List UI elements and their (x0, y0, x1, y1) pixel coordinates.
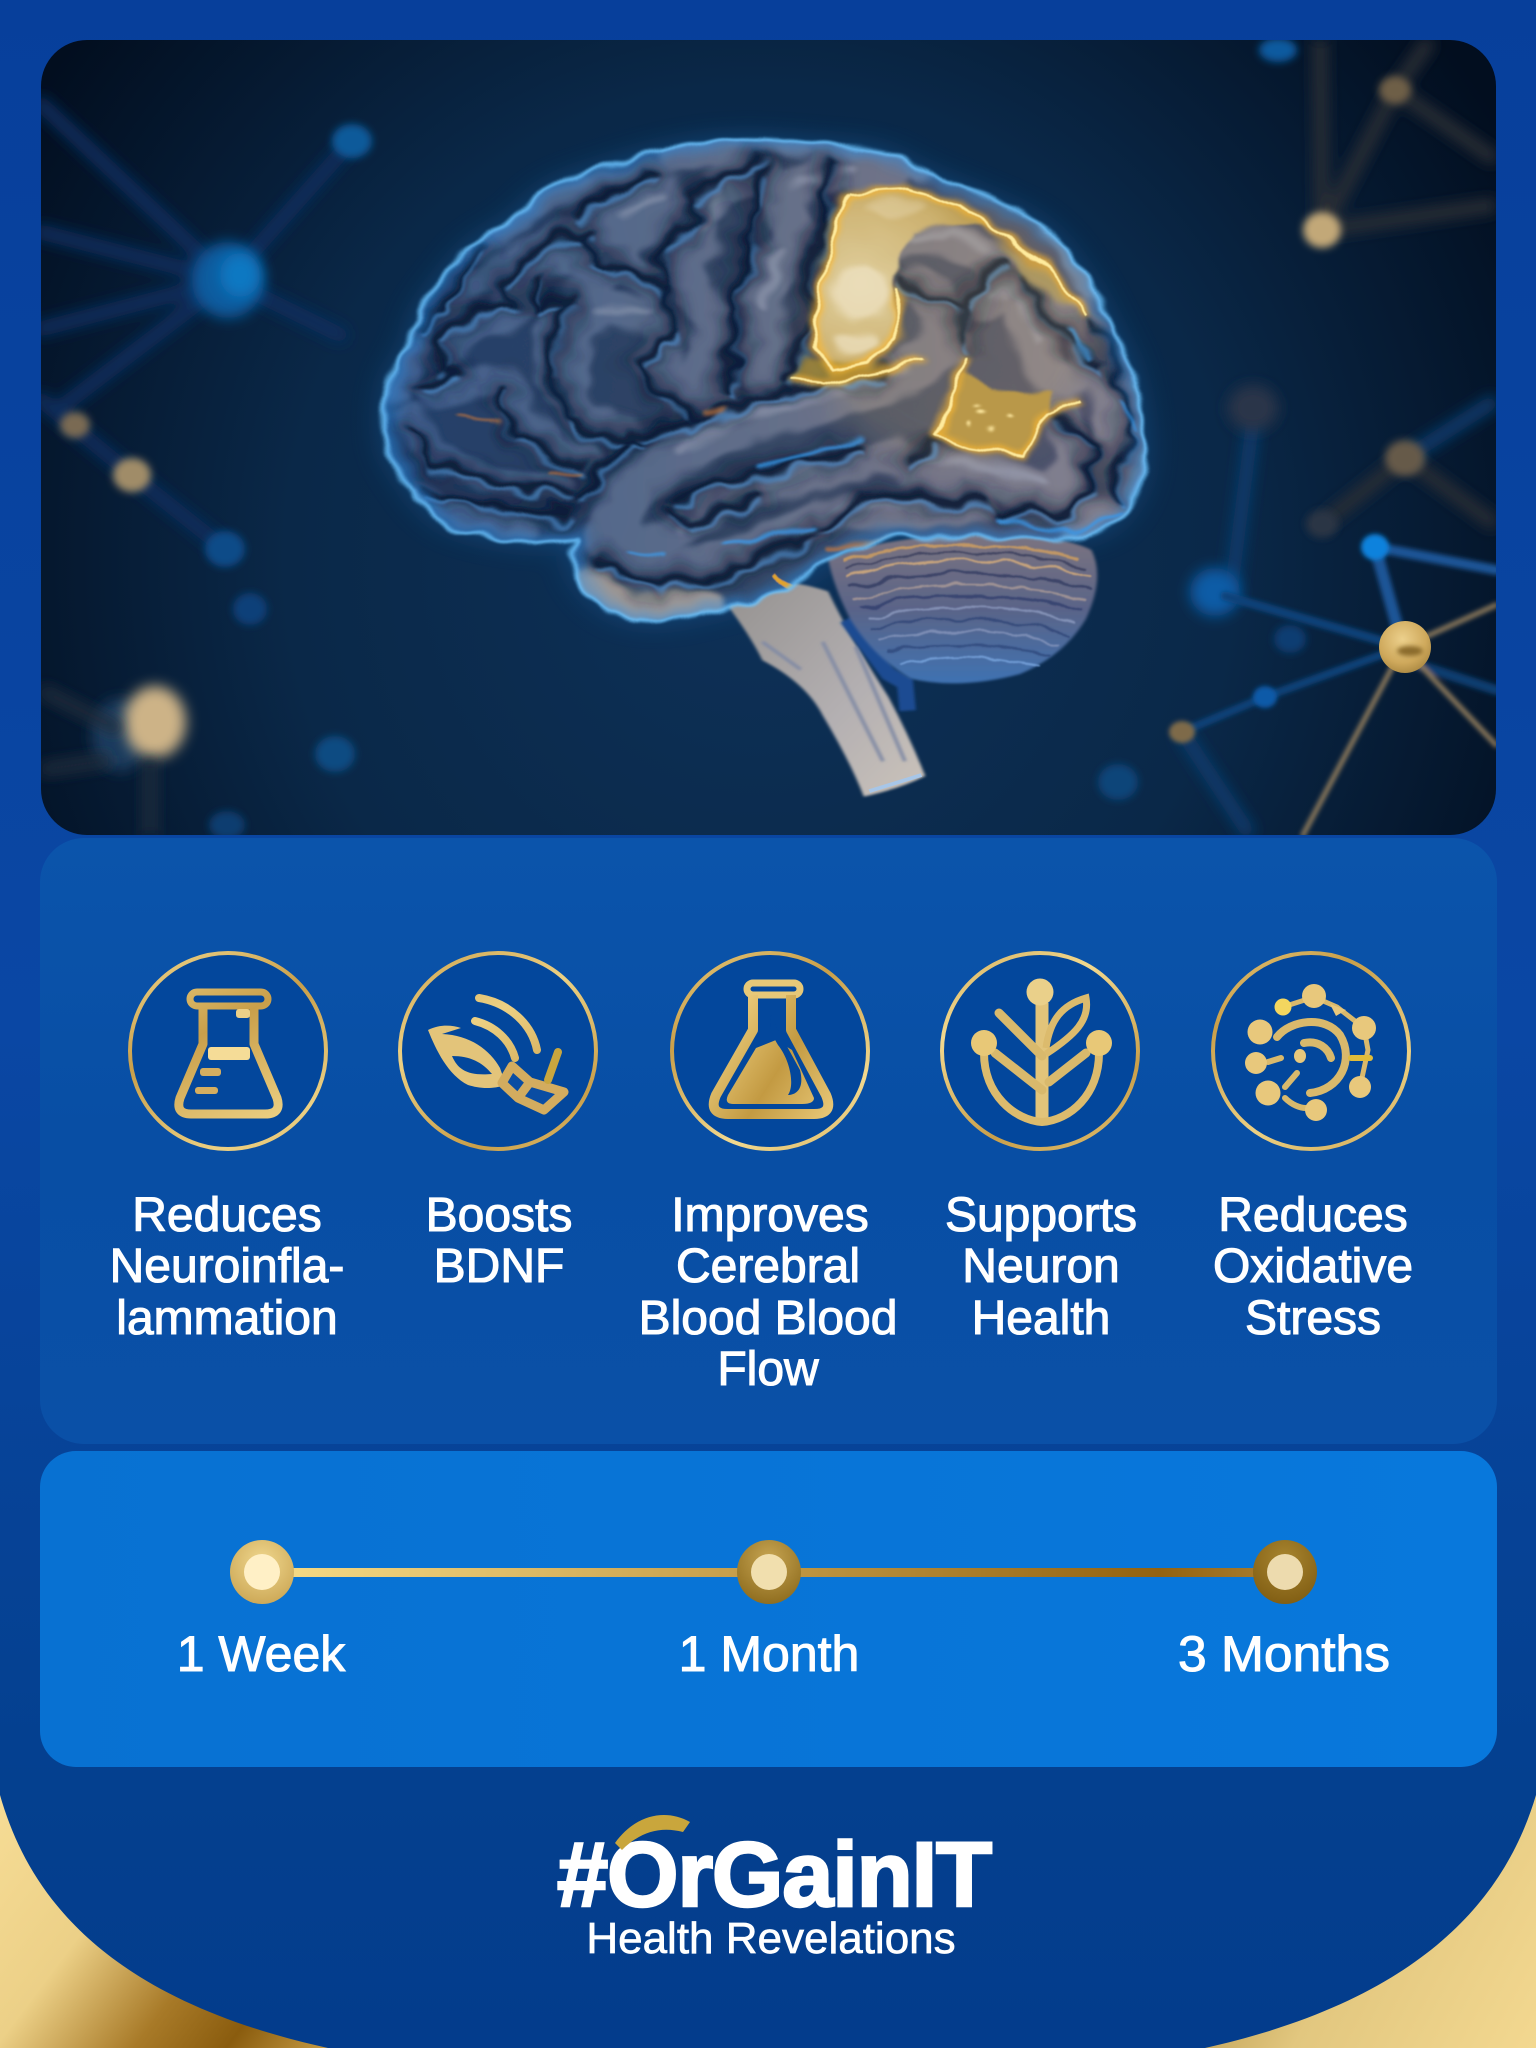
network: left blurred nodes (41, 104, 372, 839)
gold corner: right (1205, 1795, 1536, 2048)
brain rim light (384, 139, 1145, 621)
icon: plant with nodes (942, 953, 1138, 1149)
icon: lab flask with graduations (130, 953, 326, 1149)
inner rim shading (384, 139, 1145, 621)
timeline line (290, 1568, 1255, 1577)
benefit 3 (639, 953, 897, 1396)
gold corner: left (0, 1795, 328, 2048)
glowing gold region: parietal (793, 190, 1086, 384)
label: Improves Cerebral Blood Blood Flow: Improves (671, 1189, 869, 1242)
warm glow around gold regions (806, 201, 1091, 458)
benefit 1 (110, 953, 344, 1345)
glowing gold region: lower (935, 357, 1080, 456)
logo text: #OrGainIT (557, 1824, 992, 1926)
label: Reduces Neuroinflammation: Neuroinfla- (110, 1240, 344, 1293)
sulci shading, lit edges and grooves (411, 160, 1132, 593)
icon: molecule ring (1213, 953, 1409, 1149)
icon: flask with liquid (672, 953, 868, 1149)
label: 1 Week: 1 Week (177, 1626, 346, 1682)
label: 3 Months: 3 Months (1178, 1626, 1390, 1682)
label: Reduces Oxidative Stress: Oxidative (1213, 1240, 1413, 1293)
benefit 5 (1213, 953, 1413, 1345)
panel: hero image (41, 38, 1496, 839)
benefit 4 (942, 953, 1138, 1345)
icon: leaf with arcs (400, 953, 596, 1149)
panel: benefits (40, 838, 1497, 1444)
logo gold arc (615, 1815, 690, 1850)
label: Boosts BDNF: Boosts (426, 1189, 572, 1242)
label: Improves Cerebral Blood Blood Flow: Blood Blood (639, 1292, 897, 1345)
cerebellum (828, 534, 1097, 683)
label: Supports Neuron Health: Supports (945, 1189, 1137, 1242)
label: Reduces Oxidative Stress: Reduces (1218, 1189, 1408, 1242)
footer logo (557, 1815, 992, 1963)
blue rim strokes (631, 330, 1135, 555)
timeline node: 1 month (737, 1540, 801, 1604)
label: Reduces Neuroinflammation: Reduces (132, 1189, 322, 1242)
label: Reduces Oxidative Stress: Stress (1245, 1292, 1381, 1345)
label: 1 Month: 1 Month (679, 1626, 859, 1682)
label: Improves Cerebral Blood Blood Flow: Cerebral (676, 1240, 860, 1293)
network: right nodes (1098, 38, 1496, 835)
brain glow (384, 139, 1145, 621)
label: Reduces Neuroinflammation: lammation (116, 1292, 338, 1345)
label: Improves Cerebral Blood Blood Flow: Flow (717, 1343, 819, 1396)
brain stem (724, 582, 925, 797)
label: Boosts BDNF: BDNF (434, 1240, 564, 1293)
panel: timeline (40, 1451, 1497, 1767)
highlights (598, 169, 1042, 532)
label: Supports Neuron Health: Health (972, 1292, 1110, 1345)
gold sliver under brain (772, 572, 794, 590)
brain illustration (384, 139, 1145, 797)
benefit 2 (400, 953, 596, 1293)
label: Supports Neuron Health: Neuron (962, 1240, 1120, 1293)
warm accents in folds (458, 412, 889, 548)
logo tagline: Health Revelations (586, 1914, 956, 1963)
cerebrum (384, 139, 1145, 621)
timeline node: 3 months (1253, 1540, 1317, 1604)
timeline node: 1 week (230, 1540, 294, 1604)
gyri (398, 144, 1140, 610)
